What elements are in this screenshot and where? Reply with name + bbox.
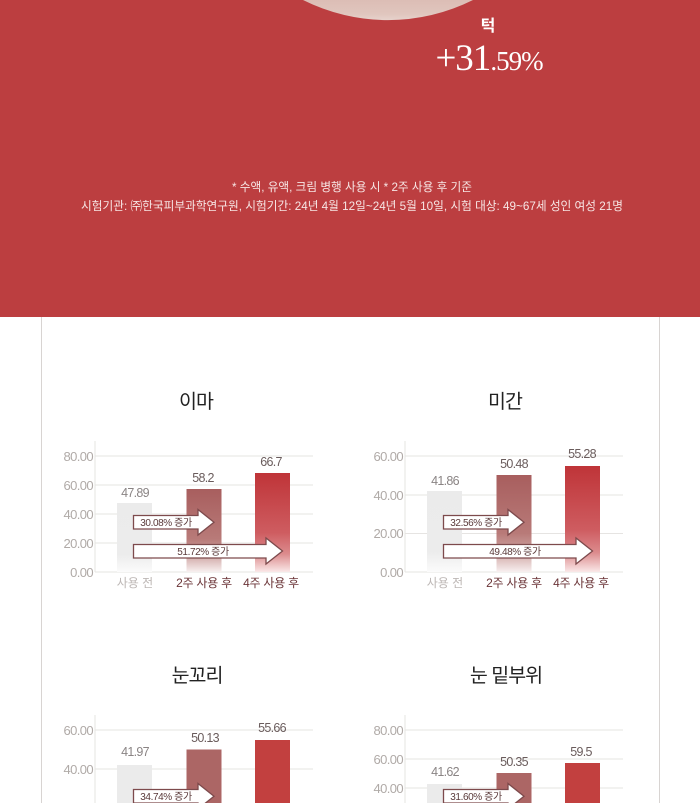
- x labels: 사용 전: [427, 576, 463, 590]
- value labels: 41.86: [431, 474, 460, 488]
- panel: forehead chart: [63, 391, 313, 590]
- axes and gridlines: 40.00: [373, 488, 403, 503]
- axes and gridlines: [373, 441, 623, 580]
- axes and gridlines: 60.00: [63, 723, 93, 738]
- panel: eye corner chart: [63, 665, 313, 803]
- x labels: 4주 사용 후: [243, 576, 299, 590]
- arrow 2 weeks: 34.74% 증가: [140, 791, 192, 803]
- value labels: [431, 447, 597, 488]
- axes and gridlines: [63, 715, 313, 803]
- arrow 2 weeks: 30.08% 증가: [140, 517, 192, 529]
- panel: under-eye chart: [373, 665, 623, 803]
- axes and gridlines: 80.00: [63, 449, 93, 464]
- x labels: 2주 사용 후: [176, 576, 232, 590]
- value labels: 50.13: [191, 731, 220, 745]
- axes and gridlines: 40.00: [373, 781, 403, 796]
- x labels: 4주 사용 후: [553, 576, 609, 590]
- footnote text: 시험기관: ㈜한국피부과학연구원, 시험기간: 24년 4월 12일~24년 5월 10일, 시험 대상: 49~67세 성인 여성 21명: [81, 199, 623, 213]
- x labels: 사용 전: [117, 576, 153, 590]
- value labels: 66.7: [260, 455, 283, 469]
- result percentage: +31.59%: [435, 38, 543, 79]
- axes and gridlines: [63, 441, 313, 580]
- value labels: 55.28: [568, 447, 597, 461]
- axes and gridlines: 60.00: [373, 449, 403, 464]
- red top panel: [0, 0, 700, 317]
- label: chin: 턱: [481, 17, 495, 35]
- arrow 4 weeks: 49.48% 증가: [489, 546, 541, 558]
- value labels: 41.97: [121, 745, 150, 759]
- value labels: 55.66: [258, 721, 287, 735]
- arrow 2 weeks: [444, 784, 524, 803]
- value labels: 47.89: [121, 486, 150, 500]
- value labels: [121, 455, 283, 500]
- axes and gridlines: 40.00: [63, 762, 93, 777]
- heading: 눈꼬리: [172, 665, 222, 687]
- axes and gridlines: 40.00: [63, 507, 93, 522]
- axes and gridlines: 0.00: [380, 565, 403, 580]
- arrow 2 weeks: [134, 510, 214, 535]
- axes and gridlines: 0.00: [70, 565, 93, 580]
- axes and gridlines: 20.00: [373, 526, 403, 541]
- bars: [117, 740, 290, 803]
- value labels: [431, 745, 593, 779]
- value labels: [121, 721, 287, 759]
- value labels: 58.2: [192, 471, 215, 485]
- bars: [117, 473, 290, 572]
- value labels: 50.35: [500, 755, 529, 769]
- x labels: 2주 사용 후: [486, 576, 542, 590]
- arrow 4 weeks: 51.72% 증가: [177, 546, 229, 558]
- heading: 미간: [488, 391, 523, 413]
- axes and gridlines: 60.00: [63, 478, 93, 493]
- circular skin photo: [303, 0, 473, 20]
- value labels: 41.62: [431, 765, 460, 779]
- axes and gridlines: 60.00: [373, 752, 403, 767]
- value labels: 59.5: [570, 745, 593, 759]
- arrow 2 weeks: [134, 784, 214, 803]
- axes and gridlines: 20.00: [63, 536, 93, 551]
- axes and gridlines: 80.00: [373, 723, 403, 738]
- footnote text: [81, 179, 623, 213]
- panel: glabella chart: [373, 391, 623, 590]
- arrow 2 weeks: 31.60% 증가: [450, 791, 502, 803]
- x labels: [117, 576, 299, 590]
- heading: 이마: [179, 391, 214, 413]
- arrow 4 weeks: [444, 538, 592, 564]
- footnote text: * 수액, 유액, 크림 병행 사용 시 * 2주 사용 후 기준: [232, 179, 472, 194]
- value labels: 50.48: [500, 457, 529, 471]
- white frame side lines: [41, 317, 660, 803]
- arrow 4 weeks: [134, 538, 282, 564]
- heading: 눈 밑부위: [470, 665, 542, 687]
- axes and gridlines: [373, 715, 623, 803]
- x labels: [427, 576, 609, 590]
- arrow 2 weeks: [444, 510, 524, 535]
- arrow 2 weeks: 32.56% 증가: [450, 517, 502, 529]
- bars: [427, 763, 600, 803]
- bars: [427, 466, 600, 572]
